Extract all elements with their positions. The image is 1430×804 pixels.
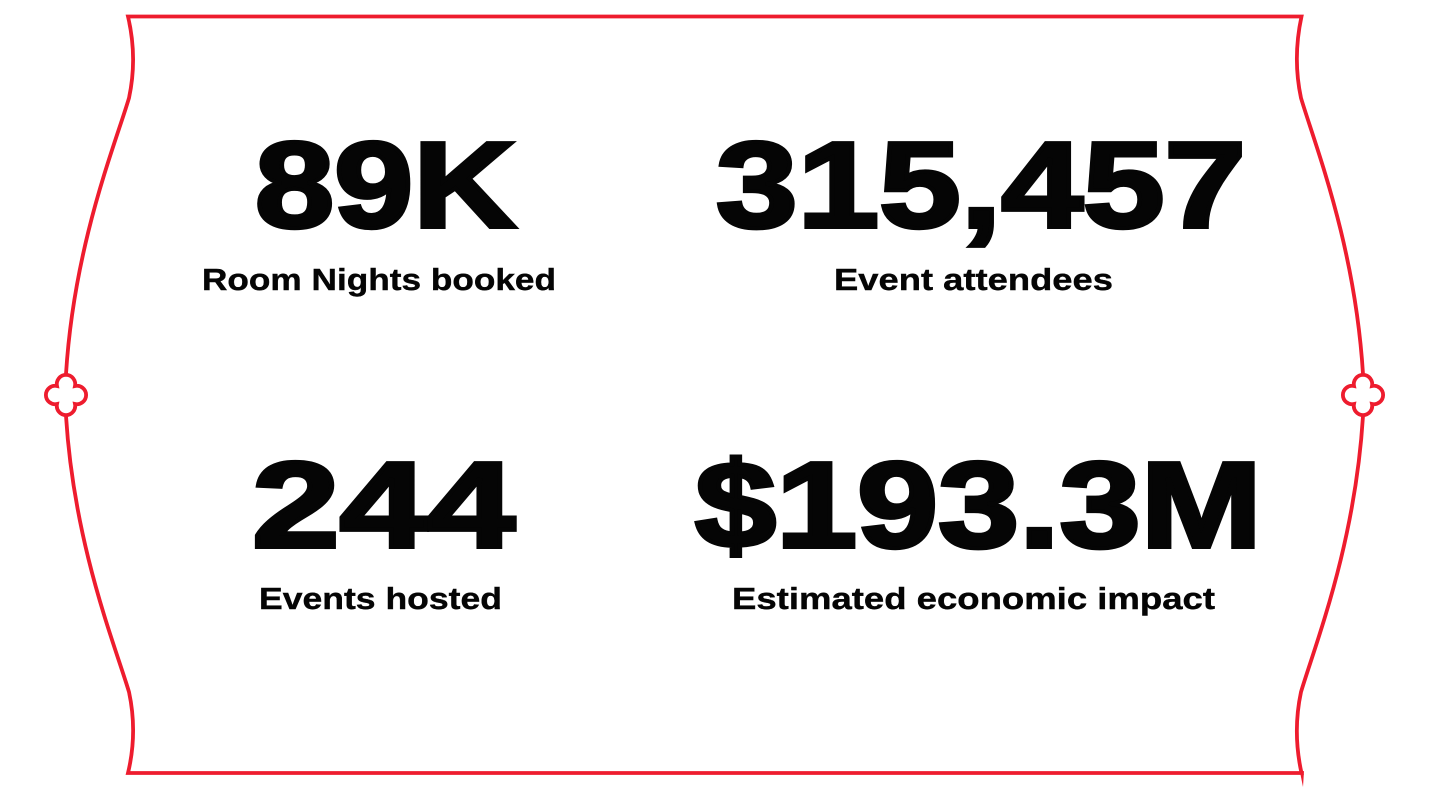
- number: 315,457: 315,457: [716, 117, 1246, 253]
- icon: left quatrefoil: [46, 375, 86, 415]
- icon: right quatrefoil: [1343, 375, 1383, 415]
- number: $193.3M: $193.3M: [695, 437, 1262, 573]
- label: room nights booked: Room Nights booked: [202, 262, 556, 297]
- number: 244: 244: [252, 437, 515, 573]
- label: event attendees: Event attendees: [834, 262, 1113, 297]
- frame corner spur: [1300, 771, 1304, 787]
- stat: room nights: [202, 117, 556, 297]
- label: estimated economic impact: Estimated economic impact: [732, 581, 1215, 616]
- label: events hosted: Events hosted: [259, 581, 502, 616]
- number: 89K: 89K: [255, 117, 516, 253]
- stat: economic impact: [695, 437, 1262, 616]
- stat: event attendees: [716, 117, 1246, 297]
- stat: events hosted: [252, 437, 515, 616]
